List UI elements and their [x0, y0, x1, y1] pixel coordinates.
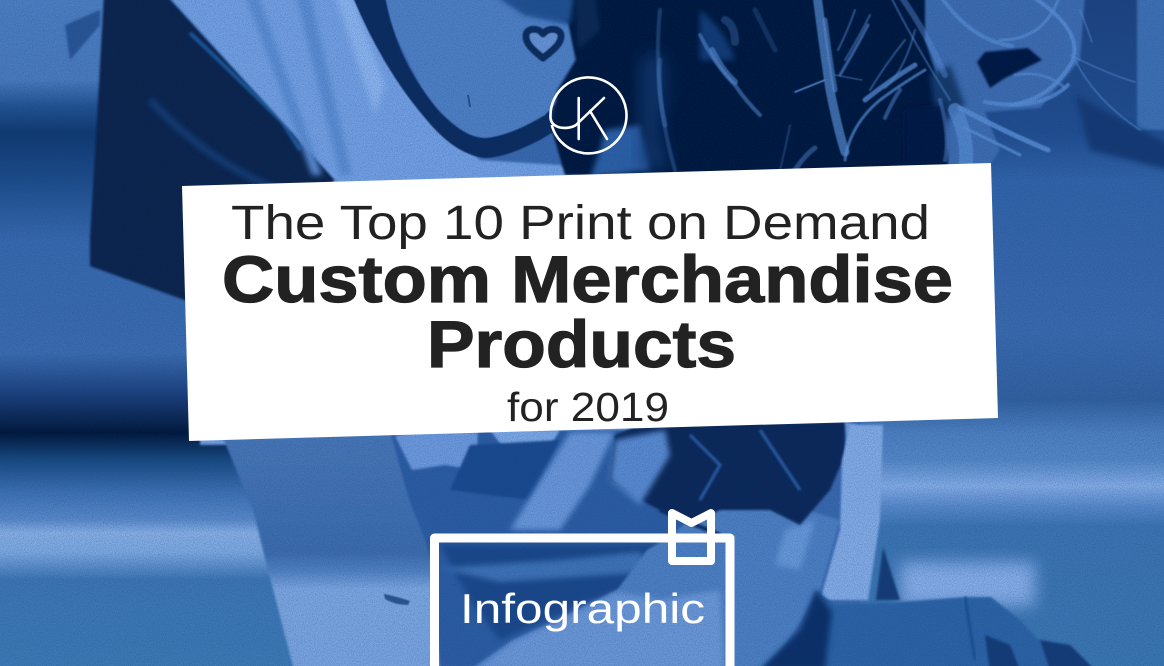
- arm left: [223, 430, 440, 666]
- jeans jacket bottom right: [760, 590, 1095, 666]
- title line 4: for 2019: [507, 384, 669, 430]
- infographic label: Infographic: [460, 585, 705, 632]
- t-shirt print and fold area: [385, 430, 730, 666]
- infographic badge frame: [434, 538, 730, 666]
- logo: K in a circle: [550, 77, 626, 153]
- shirt sleeve strip right: [820, 425, 900, 600]
- arm right foreground: [470, 505, 840, 666]
- title panel: [182, 163, 998, 441]
- title line 3: Products: [427, 307, 736, 381]
- title line 2: Custom Merchandise: [222, 242, 953, 316]
- heart pendant: [526, 29, 561, 58]
- hair: lower: [610, 422, 881, 535]
- title line 1: The Top 10 Print on Demand: [231, 197, 930, 250]
- arm tattoo mark: [384, 594, 410, 605]
- hair: upper: [495, 0, 1140, 178]
- icon: bookmark: [672, 513, 711, 561]
